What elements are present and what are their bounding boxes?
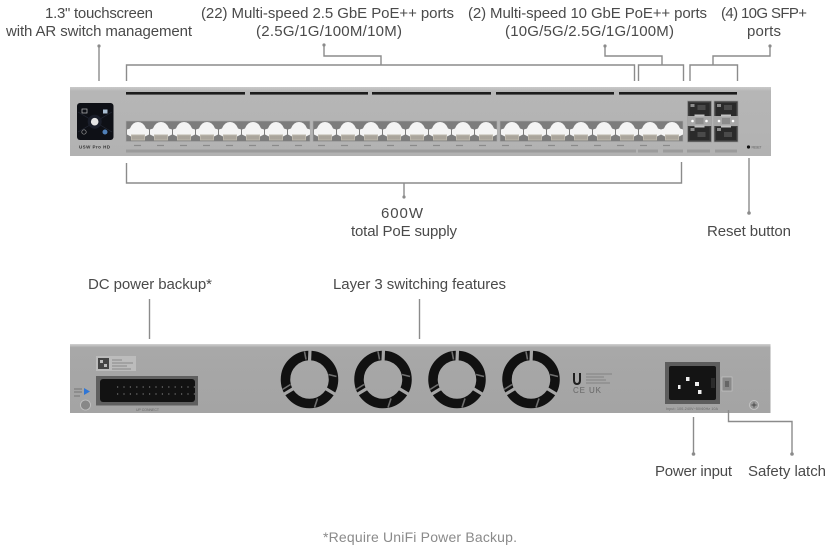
leader: touchscreen bbox=[97, 44, 101, 81]
cooling fans bbox=[282, 350, 558, 408]
label: 2.5 GbE ports: (2.5G/1G/100M/10M) bbox=[256, 23, 402, 40]
label: DC power backup: DC power backup* bbox=[88, 276, 212, 293]
safety latch bbox=[722, 377, 732, 391]
icon: blue indicator bbox=[74, 388, 90, 396]
port number marks bbox=[134, 144, 682, 146]
label: layer 3 features: Layer 3 switching features bbox=[333, 276, 506, 293]
label: PoE supply: 600W bbox=[381, 205, 424, 222]
panel: switch front bbox=[70, 87, 771, 156]
label: SFP+ ports: ports bbox=[747, 23, 781, 40]
label: 2.5 GbE ports: (22) Multi-speed 2.5 GbE PoE++ ports bbox=[201, 5, 454, 22]
label: 10 GbE ports: (2) Multi-speed 10 GbE PoE++ ports bbox=[468, 5, 707, 22]
SFP+ cages bbox=[688, 101, 738, 142]
RJ45 port groups bbox=[126, 121, 683, 142]
connector caption: UP CONNECT bbox=[136, 408, 160, 412]
DC backup connector bbox=[96, 376, 198, 406]
port status strips bbox=[126, 150, 737, 152]
AC power inlet bbox=[665, 362, 720, 404]
label: reset button: Reset button bbox=[707, 223, 791, 240]
footnote: *Require UniFi Power Backup. bbox=[323, 529, 517, 545]
bracket: PoE supply bbox=[126, 162, 682, 199]
bracket: 10 GbE ports bbox=[603, 44, 684, 81]
leader: layer 3 features bbox=[418, 299, 420, 339]
icon: regulatory label: CE UK bbox=[573, 386, 602, 395]
leader: power input bbox=[692, 417, 695, 456]
panel: switch rear bbox=[70, 344, 770, 413]
icon: screw right bbox=[750, 400, 758, 410]
icon: touchscreen display bbox=[77, 103, 114, 140]
leader: DC power backup bbox=[148, 299, 150, 339]
power rating: Input: 100-240V~50/60Hz 10A bbox=[666, 407, 719, 411]
reset button: RESET bbox=[752, 145, 762, 149]
label: touchscreen: with AR switch management bbox=[5, 23, 193, 40]
leader: safety latch bbox=[728, 410, 794, 456]
label: safety latch: Safety latch bbox=[748, 463, 826, 480]
bracket: 2.5 GbE ports bbox=[126, 43, 634, 81]
label: touchscreen: 1.3" touchscreen bbox=[45, 5, 153, 22]
bracket: SFP+ ports bbox=[690, 44, 772, 81]
label: PoE supply: total PoE supply bbox=[351, 223, 458, 240]
label: power input: Power input bbox=[655, 463, 733, 480]
icon: screw left bbox=[80, 400, 90, 410]
leader: reset button bbox=[747, 158, 751, 215]
reset button bbox=[747, 145, 762, 149]
QR label bbox=[96, 356, 136, 371]
product name: USW Pro HD bbox=[79, 144, 111, 150]
icon: regulatory label bbox=[573, 373, 612, 395]
black top strips bbox=[126, 92, 737, 95]
label: SFP+ ports: (4) 10G SFP+ bbox=[721, 5, 807, 22]
label: 10 GbE ports: (10G/5G/2.5G/1G/100M) bbox=[505, 23, 674, 40]
